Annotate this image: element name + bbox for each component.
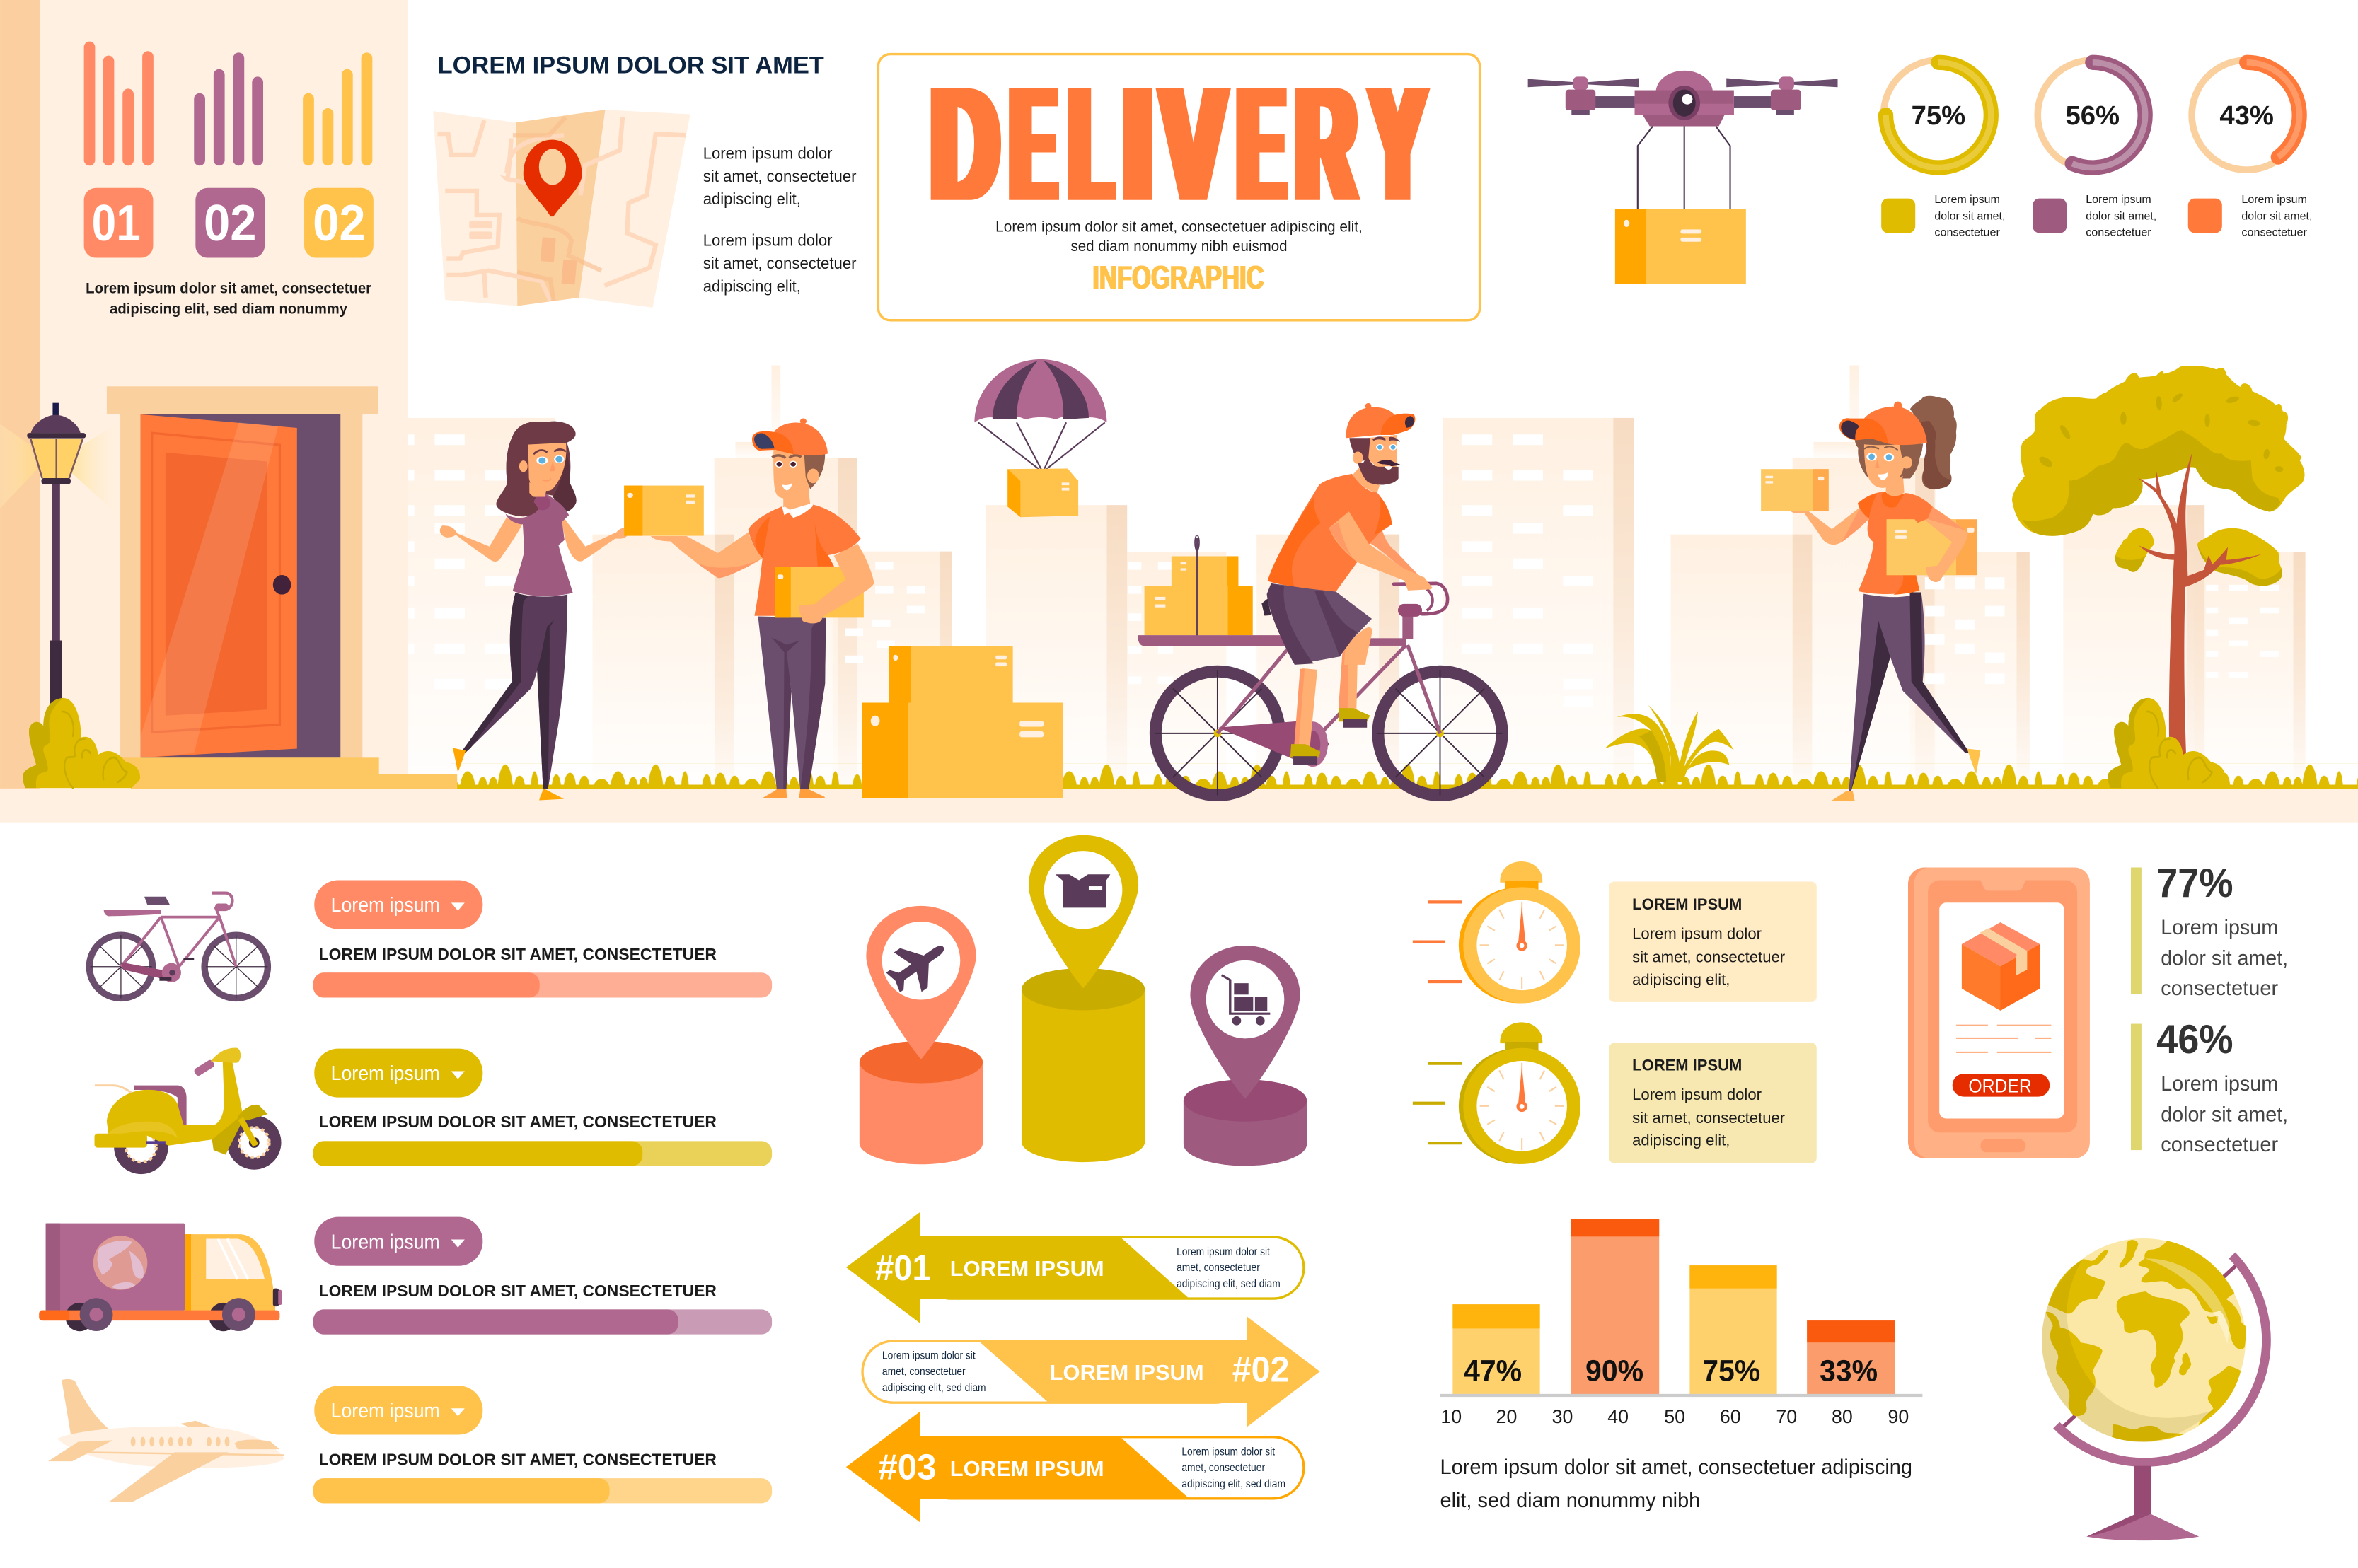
box held high: [1761, 469, 1829, 511]
category pill: [314, 1386, 482, 1434]
info card 2: [1609, 1043, 1817, 1163]
donut legend: consectetuer: [2241, 227, 2308, 239]
icon: truck: [39, 1224, 282, 1331]
category pill: [314, 1217, 482, 1266]
stat: 77%: 77%: [2156, 861, 2233, 906]
category pill: Lorem ipsum: [331, 1231, 440, 1253]
arrow callout #01: amet, consectetuer: [1177, 1262, 1260, 1274]
number badge 01: [84, 188, 153, 258]
bar 33%: [1807, 1320, 1895, 1395]
stat: 77%: [2131, 861, 2288, 1000]
arrow callout #02: [862, 1316, 1320, 1427]
canopy: [2012, 366, 2305, 536]
stat: 46%: Lorem ipsum: [2161, 1072, 2278, 1096]
arrow callout #01: Lorem ipsum dolor sit: [1177, 1246, 1270, 1258]
bar 47%: 47%: [1464, 1354, 1522, 1388]
bar 75%: [1689, 1265, 1777, 1395]
small foliage left: [2115, 528, 2154, 572]
axis labels: 50: [1664, 1406, 1685, 1427]
vehicle row: bicycle: [89, 881, 772, 998]
info card 1: Lorem ipsum dolor: [1632, 924, 1762, 942]
subtitle text: sed diam nonummy nibh euismod: [1070, 238, 1288, 255]
donut chart: 56%: [2038, 60, 2147, 170]
number badge 01: 01: [92, 195, 141, 252]
box carried under arm: [775, 567, 864, 617]
category pill: [314, 881, 482, 929]
character: courier on bicycle: [1138, 403, 1503, 795]
map pin: [524, 140, 582, 216]
progress bar: [313, 1141, 772, 1166]
bars group 02: [194, 52, 263, 165]
rear leg: [1346, 645, 1351, 709]
donut legend: dolor sit amet,: [2086, 210, 2156, 222]
vehicle row: scooter: [95, 1048, 772, 1174]
donut legend: Lorem ipsum: [2241, 194, 2307, 206]
caption under badges: [86, 279, 371, 318]
number badge 03: 02: [313, 195, 366, 252]
icon: airplane: [48, 1379, 284, 1502]
bar 90%: 90%: [1585, 1354, 1643, 1388]
box handed over: [624, 486, 704, 536]
arrow callout #02: LOREM IPSUM: [1050, 1360, 1204, 1385]
progress bar: [313, 1478, 772, 1503]
caption under badges: Lorem ipsum dolor sit amet, consectetuer: [86, 279, 371, 296]
title: delivery: R: [1296, 53, 1356, 235]
info card 1: sit amet, consectetuer: [1632, 948, 1786, 965]
donut chart: 56%: 56%: [2066, 100, 2120, 131]
location pin on cylinder: plane: [860, 906, 983, 1164]
order button: ORDER: [1968, 1075, 2032, 1096]
upper body: [1790, 396, 1977, 595]
stat: 46%: 46%: [2156, 1017, 2233, 1062]
icon: folded map with pin: [433, 110, 690, 308]
chart caption: [1440, 1456, 1912, 1512]
rider body: [1261, 403, 1447, 665]
arrow callout #03: #03: [878, 1447, 936, 1487]
bars group 03: [303, 52, 372, 165]
donut legend: dolor sit amet,: [1934, 210, 2005, 222]
icon: scooter: [95, 1048, 282, 1174]
icon: open box: [1056, 874, 1110, 907]
location pin on cylinder: parcel: [1022, 835, 1145, 1162]
arrow callout #03: LOREM IPSUM: [950, 1456, 1104, 1481]
donut legend: consectetuer: [2086, 227, 2151, 239]
chart caption: elit, sed diam nonummy nibh: [1440, 1489, 1700, 1512]
info card 2: Lorem ipsum dolor: [1632, 1086, 1762, 1103]
small foliage right: [2197, 528, 2282, 586]
axis labels: 20: [1496, 1406, 1517, 1427]
arrow callout #03: amet, consectetuer: [1181, 1462, 1265, 1474]
stat: 46%: consectetuer: [2161, 1133, 2278, 1156]
arrow callout #02: Lorem ipsum dolor sit: [882, 1350, 976, 1362]
info card 2: sit amet, consectetuer: [1632, 1109, 1786, 1127]
arrow callout #02: #02: [1232, 1349, 1290, 1389]
icon: delivery drone with box: [1528, 71, 1838, 284]
grass strip: [451, 764, 2358, 789]
info card 2: adipiscing elit,: [1632, 1132, 1730, 1149]
donut legend: dolor sit amet,: [2241, 210, 2312, 222]
arrow callout #02: adipiscing elit, sed diam: [882, 1382, 986, 1394]
bars group 01: [84, 42, 154, 165]
donut chart: 43%: 43%: [2219, 100, 2274, 131]
panel: bar chart icons with numbers: [84, 42, 374, 318]
order button: [1953, 1074, 2050, 1097]
number badge 02: [195, 188, 265, 258]
bar 47%: [1452, 1304, 1540, 1395]
infographic label: INFOGRAPHIC: [1092, 259, 1264, 296]
text block beside map: Lorem ipsum dolor: [703, 231, 833, 250]
globe stand: [2057, 1255, 2266, 1463]
chart caption: Lorem ipsum dolor sit amet, consectetuer adipiscing: [1440, 1456, 1912, 1479]
stat: 77%: dolor sit amet,: [2161, 947, 2288, 970]
donut legend: Lorem ipsum: [1934, 194, 2000, 206]
box carried under arm: [1887, 519, 1977, 575]
stat: 46%: [2131, 1017, 2288, 1156]
cargo boxes: [1145, 535, 1253, 636]
text block beside map: [703, 144, 857, 295]
category pill: Lorem ipsum: [331, 1400, 440, 1422]
text block beside map: adipiscing elit,: [703, 277, 801, 295]
bar chart: [1440, 1219, 1922, 1427]
donut legend: Lorem ipsum: [2086, 194, 2151, 206]
progress bar: [313, 972, 772, 998]
icon: trolley: [1221, 974, 1270, 1026]
title: delivery: D: [931, 53, 998, 235]
arrow callout #01: LOREM IPSUM: [950, 1256, 1104, 1281]
trunk and branches: [2138, 453, 2262, 755]
location pin on cylinder: trolley: [1184, 946, 1307, 1166]
parachute with box: [974, 359, 1106, 517]
arrow callout #02: amet, consectetuer: [882, 1366, 966, 1378]
bar 75%: 75%: [1702, 1354, 1760, 1388]
info card 1: [1609, 881, 1817, 1002]
category pill: Lorem ipsum: [331, 1062, 440, 1085]
heading: lorem ipsum dolor sit amet: LOREM IPSUM DOLOR SIT AMET: [438, 52, 824, 79]
ground strip: [0, 789, 2358, 823]
axis labels: 60: [1720, 1406, 1741, 1427]
icon: smartphone with order: [1908, 867, 2090, 1158]
bar 33%: 33%: [1820, 1354, 1878, 1388]
character: courier man: [651, 419, 874, 798]
axis labels: 40: [1607, 1406, 1629, 1427]
bicycle wheels: [1155, 670, 1503, 795]
donut chart: 75%: [1883, 60, 1994, 170]
donut legend: [1881, 194, 2312, 239]
axis labels: [1440, 1406, 1909, 1427]
caption under badges: adipiscing elit, sed diam nonummy: [110, 301, 347, 318]
city skyline background: [408, 366, 2306, 789]
bar 90%: [1571, 1219, 1659, 1395]
icon: bicycle: [89, 893, 267, 998]
stat: 46%: dolor sit amet,: [2161, 1103, 2288, 1127]
background: left wall panel: [0, 0, 408, 789]
arrow callout #03: Lorem ipsum dolor sit: [1181, 1446, 1276, 1458]
icon: orange stopwatch: [1413, 861, 1580, 1003]
number badge 03: [304, 188, 374, 258]
arrow callout #01: #01: [875, 1248, 931, 1288]
row title: LOREM IPSUM DOLOR SIT AMET, CONSECTETUER: [319, 1282, 717, 1300]
bush: left: [23, 698, 140, 788]
title panel: Y: [1371, 53, 1425, 235]
axis labels: 90: [1888, 1406, 1909, 1427]
stat: 77%: Lorem ipsum: [2161, 916, 2278, 939]
info card 1: adipiscing elit,: [1632, 970, 1730, 988]
donut chart: 75%: 75%: [1912, 100, 1965, 131]
street lamp: [0, 403, 119, 704]
arrow callout #01: adipiscing elit, sed diam: [1177, 1278, 1281, 1290]
house door: [107, 386, 457, 789]
title panel: [878, 53, 1480, 320]
title: delivery: E: [1238, 53, 1284, 235]
bush: right: [2108, 698, 2225, 788]
title: delivery: V: [1162, 53, 1225, 235]
number badge 02: 02: [204, 195, 256, 252]
category pill: [314, 1049, 482, 1098]
arrow callout #01: [846, 1212, 1304, 1323]
axis labels: 10: [1440, 1406, 1462, 1427]
title: delivery: L: [1070, 53, 1111, 235]
row title: LOREM IPSUM DOLOR SIT AMET, CONSECTETUER: [319, 945, 717, 963]
info card 1: LOREM IPSUM: [1632, 895, 1742, 913]
title: delivery: I: [1123, 53, 1153, 235]
hanging box: [1615, 209, 1746, 284]
axis labels: 80: [1832, 1406, 1853, 1427]
text block beside map: sit amet, consectetuer: [703, 254, 857, 272]
arrow callout #03: [846, 1412, 1304, 1522]
doorstep: [120, 757, 379, 774]
donut chart: 43%: [2192, 60, 2301, 170]
icon: globe on stand: [2042, 1238, 2266, 1540]
text block beside map: adipiscing elit,: [703, 190, 801, 208]
donut legend: consectetuer: [1934, 227, 2001, 239]
icon: yellow stopwatch: [1413, 1022, 1580, 1164]
stat: 77%: consectetuer: [2161, 977, 2278, 1000]
icon: airplane: [879, 927, 957, 1002]
parcel on screen: [1962, 922, 2040, 1011]
axis labels: 30: [1552, 1406, 1573, 1427]
row title: LOREM IPSUM DOLOR SIT AMET, CONSECTETUER: [319, 1450, 717, 1468]
arrow callout #03: adipiscing elit, sed diam: [1181, 1478, 1285, 1490]
subtitle text: Lorem ipsum dolor sit amet, consectetuer adipiscing elit,: [995, 218, 1363, 235]
info card 2: LOREM IPSUM: [1632, 1056, 1742, 1074]
subtitle text: [995, 218, 1363, 255]
character: courier woman with ponytail: [1761, 396, 1980, 801]
vehicle row: truck: [39, 1217, 772, 1335]
category pill: Lorem ipsum: [331, 894, 440, 917]
title: delivery: E: [1011, 53, 1055, 235]
text block beside map: sit amet, consectetuer: [703, 167, 857, 185]
stacked boxes: [862, 646, 1063, 798]
bicycle frame: [1218, 645, 1440, 733]
vehicle row: plane: [48, 1379, 772, 1503]
progress bar: [313, 1309, 772, 1335]
plant: [1605, 705, 1734, 782]
tree: [2012, 366, 2305, 755]
row title: LOREM IPSUM DOLOR SIT AMET, CONSECTETUER: [319, 1113, 717, 1131]
character: customer woman: [440, 422, 628, 801]
axis labels: 70: [1776, 1406, 1797, 1427]
text block beside map: Lorem ipsum dolor: [703, 144, 833, 162]
